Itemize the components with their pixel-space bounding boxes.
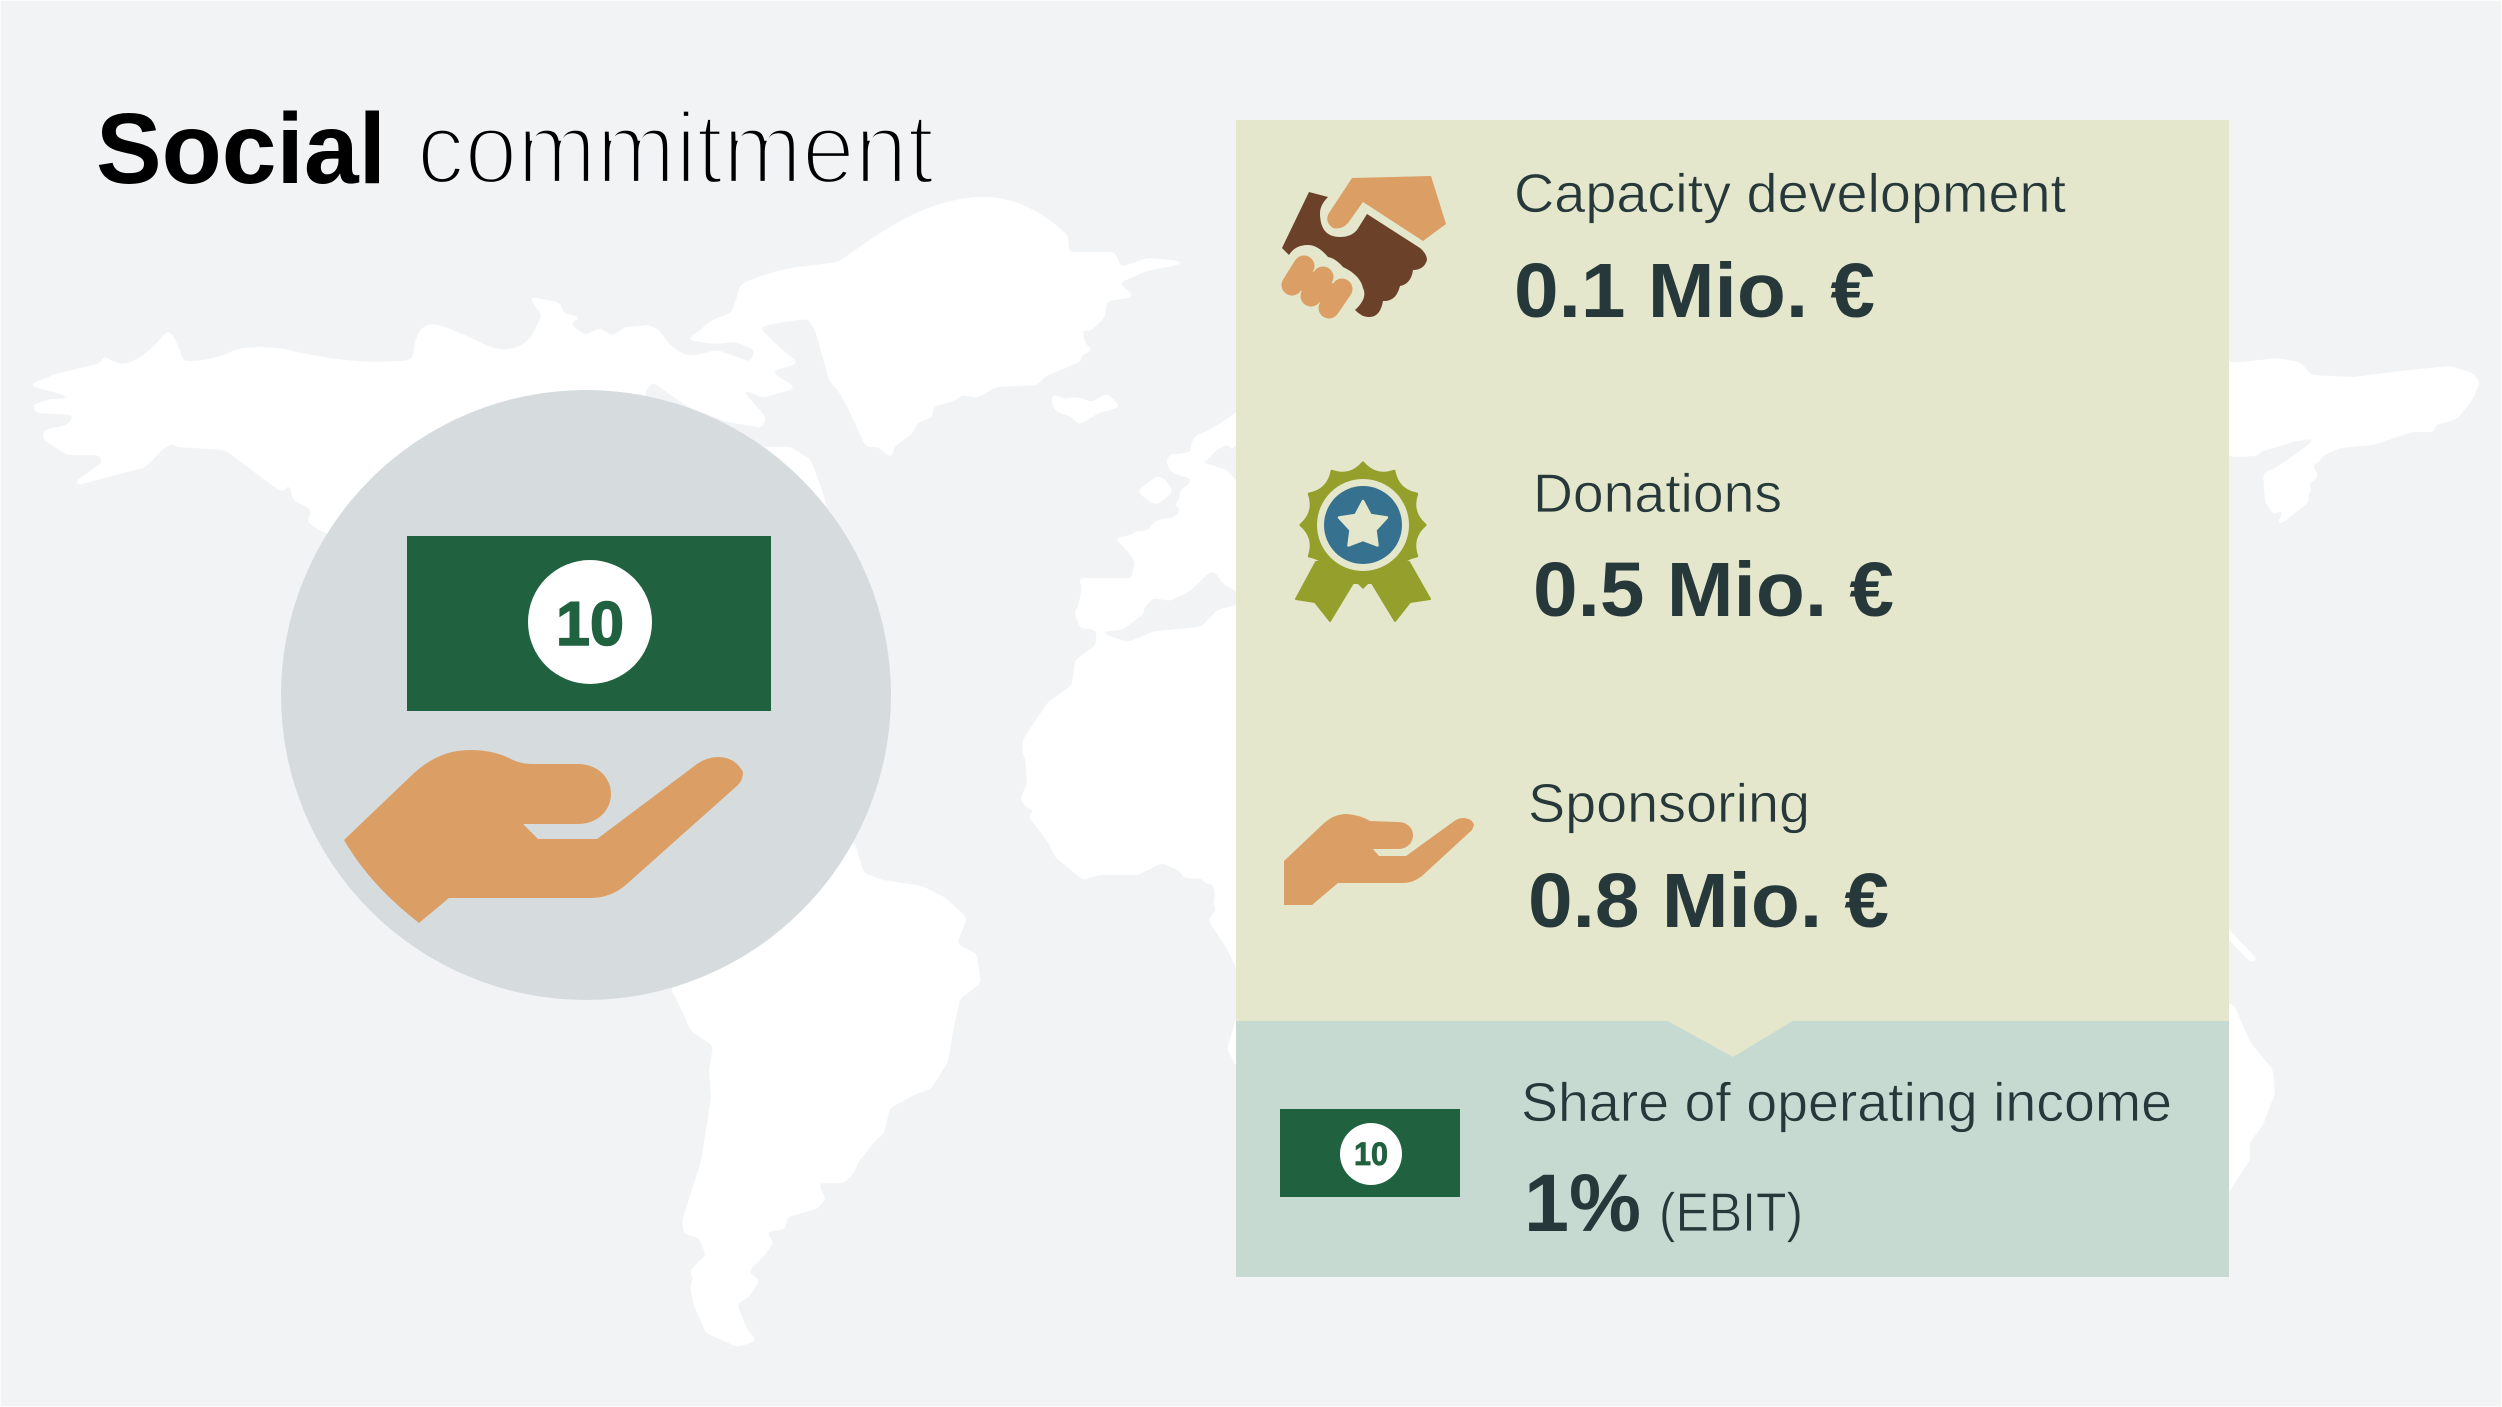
row: sponsoring — [1284, 772, 1889, 944]
map: Iceland — [1052, 393, 1121, 425]
map: Baltic sea cutout — [1204, 444, 1237, 480]
map: West Africa coast fragment — [1227, 989, 1250, 1092]
title: Social — [96, 93, 386, 205]
map: Ireland — [1137, 476, 1173, 505]
label: capacity development: Capacity development — [1514, 162, 2066, 224]
value: 1%: 1% — [1524, 1158, 1641, 1249]
title: commitment — [417, 93, 934, 205]
value: 0.5 Mio. €: 0.5 Mio. € — [1533, 547, 1894, 633]
callout notch — [1666, 1020, 1794, 1057]
map: Arabian sliver — [2210, 910, 2259, 962]
value note: EBIT: (EBIT) — [1659, 1181, 1803, 1243]
panel: share of operating income — [1236, 1020, 2229, 1277]
icon: small open hand — [1284, 814, 1474, 905]
icon: banknote: 10 — [556, 590, 624, 659]
icon: small banknote: 10 — [1354, 1136, 1388, 1172]
map: Southeast coast — [2210, 990, 2275, 1220]
map: Africa — [1020, 600, 1250, 995]
title — [96, 93, 934, 205]
row: capacity development — [1282, 162, 2066, 334]
map: Scandinavia and Europe — [1074, 405, 1255, 631]
map: Asia far east — [2210, 358, 2480, 525]
label: sponsoring: Sponsoring — [1528, 772, 1810, 834]
badge circle — [281, 390, 891, 1000]
icon: small banknote — [1280, 1109, 1460, 1197]
map: North America and Greenland — [27, 197, 1193, 560]
panel: programme spending — [1236, 120, 2229, 1021]
value: 0.8 Mio. €: 0.8 Mio. € — [1528, 858, 1889, 944]
icon: banknote — [407, 536, 771, 711]
row: donations — [1296, 462, 1894, 633]
icon: handshake — [1282, 176, 1446, 317]
icon: open hand — [344, 750, 743, 923]
map: South America — [671, 841, 981, 1347]
label: share of operating income: Share of operating income — [1521, 1071, 2172, 1133]
value: 0.1 Mio. €: 0.1 Mio. € — [1514, 248, 1875, 334]
label: donations: Donations — [1533, 462, 1782, 524]
main badge — [281, 390, 891, 1000]
icon: award rosette — [1296, 463, 1430, 621]
